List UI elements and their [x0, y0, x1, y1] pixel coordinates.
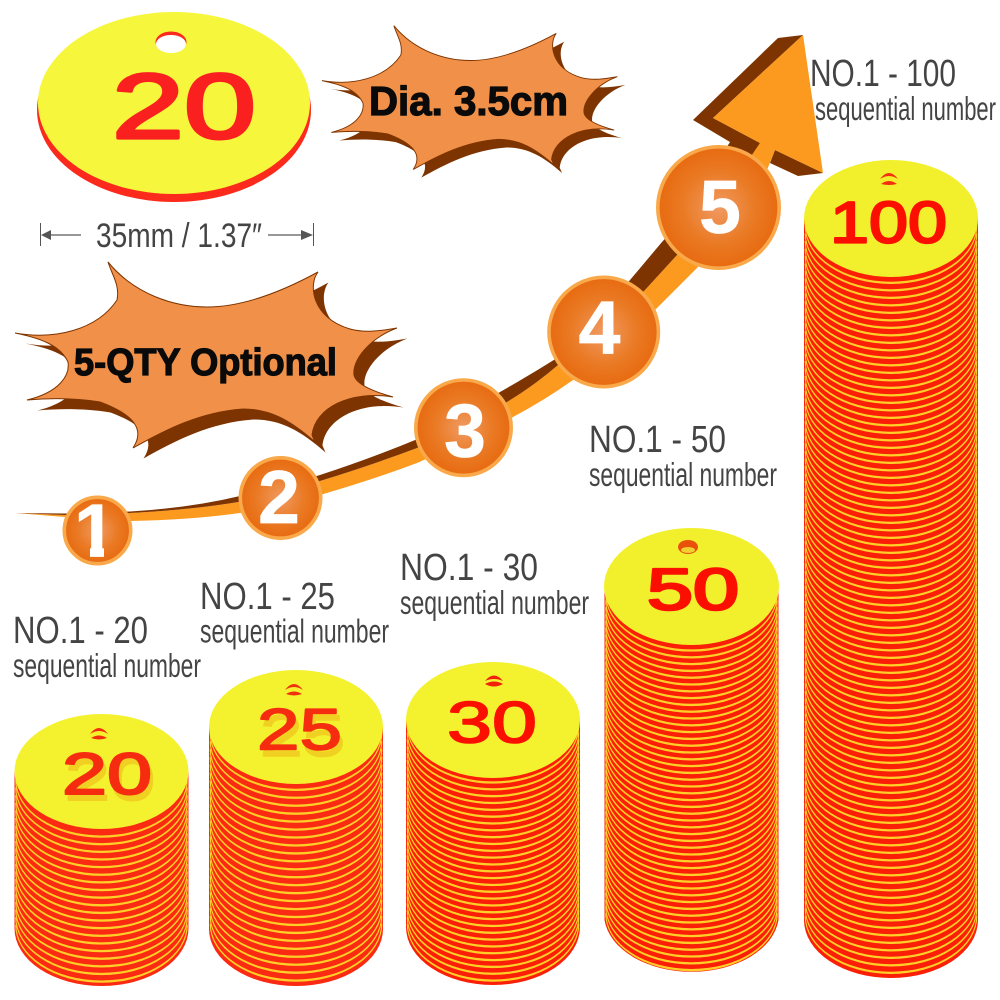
dimension line 35mm / 1.37 inch: 35mm / 1.37″ — [96, 217, 262, 255]
label: NO.1 - 100 — [810, 53, 996, 127]
stack of 50 tags: 50 — [647, 558, 739, 622]
label: NO.1 - 25: NO.1 - 25 — [200, 576, 335, 618]
step 3 badge — [416, 380, 511, 475]
stack of 20 tags: 20 — [65, 748, 155, 813]
label: NO.1 - 100: NO.1 - 100 — [810, 53, 956, 95]
burst: 5-QTY Optional: 5-QTY Optional — [74, 342, 337, 384]
burst: 5-QTY Optional — [15, 262, 408, 458]
label: NO.1 - 20 — [13, 610, 201, 684]
step 1 badge: 1 — [74, 489, 116, 573]
stack of 25 tags: 25 — [257, 698, 342, 762]
step 5 badge — [658, 147, 779, 268]
label: NO.1 - 30: sequential number — [400, 584, 589, 621]
step 1 badge — [62, 496, 132, 566]
growth arrow — [15, 35, 823, 521]
stack of 50 tags — [604, 528, 779, 972]
label: NO.1 - 25: sequential number — [200, 613, 389, 650]
step 3 badge: 3 — [444, 389, 486, 473]
step 4 badge — [549, 277, 658, 387]
label: NO.1 - 25 — [200, 576, 389, 650]
burst: Dia. 3.5cm: Dia. 3.5cm — [369, 78, 568, 124]
label: NO.1 - 30 — [400, 547, 589, 621]
label: NO.1 - 30: NO.1 - 30 — [400, 547, 538, 589]
step 2 badge: 2 — [258, 455, 300, 539]
label: NO.1 - 20: sequential number — [13, 647, 201, 684]
step 5 badge: 5 — [699, 165, 741, 249]
stack of 30 tags: 30 — [447, 690, 537, 756]
stack of 25 tags — [209, 670, 383, 986]
stack of 20 tags: 20 — [62, 742, 152, 807]
step 4 badge: 4 — [579, 286, 621, 370]
step 2 badge — [240, 455, 321, 539]
label: NO.1 - 50 — [589, 419, 777, 493]
label: NO.1 - 50: NO.1 - 50 — [589, 419, 726, 461]
label: NO.1 - 20: NO.1 - 20 — [13, 610, 148, 652]
burst: Dia. 3.5cm — [322, 26, 625, 178]
stack of 100 tags: 100 — [830, 190, 947, 256]
stack of 100 tags — [804, 160, 978, 978]
stack of 20 tags — [14, 714, 188, 986]
stack of 30 tags — [406, 662, 580, 985]
label: NO.1 - 50: sequential number — [589, 456, 777, 493]
stack of 25 tags: 25 — [260, 704, 345, 769]
sample tag number 20 — [37, 12, 311, 202]
sample tag number 20: 20 — [112, 56, 256, 158]
